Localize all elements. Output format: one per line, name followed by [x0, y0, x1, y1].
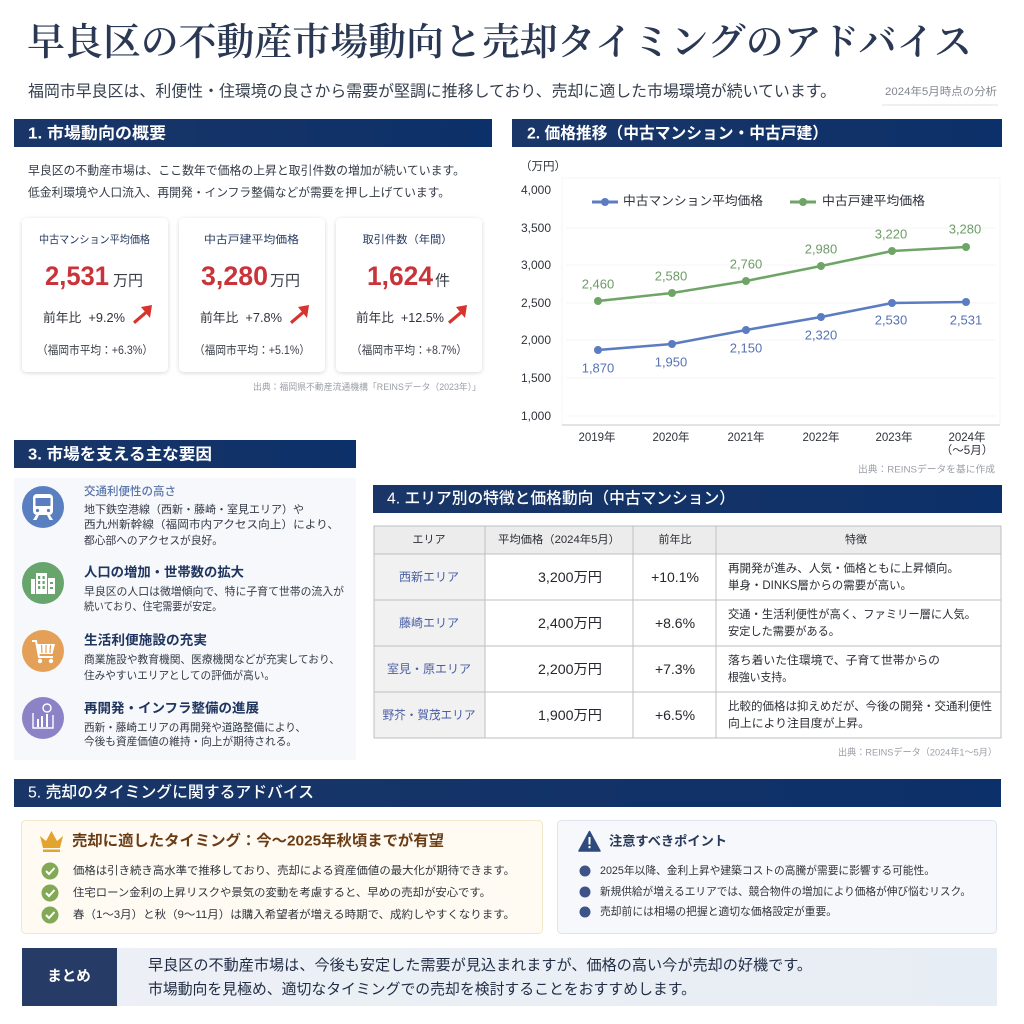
y axis labels: 1,500: [521, 371, 551, 385]
icon: redevelopment: [22, 697, 64, 739]
row: Noke: 向上により注目度が上昇。: [728, 716, 870, 730]
callout: cautions: 新規供給が増えるエリアでは、競合物件の増加により価格が伸び悩むリスク。: [600, 885, 971, 898]
icon: crown: [40, 831, 63, 852]
area table: [374, 526, 1001, 738]
driver: transport: 都心部へのアクセスが良好。: [84, 533, 223, 547]
y axis labels: 2,000: [521, 333, 551, 347]
driver: amenities: 商業施設や教育機関、医療機関などが充実しており、: [84, 652, 340, 666]
summary band: 早良区の不動産市場は、今後も安定した需要が見込まれますが、価格の高い今が売却の好機です。: [148, 957, 812, 974]
callout: cautions: 2025年以降、金利上昇や建築コストの高騰が需要に影響する可能性。: [600, 864, 935, 877]
panel: selling advice: [14, 779, 1001, 1006]
row: Nishijin: 西新エリア: [399, 570, 459, 584]
card: transactions: 件: [435, 272, 450, 290]
icon: train: [22, 486, 64, 528]
overview text: 低金利環境や人口流入、再開発・インフラ整備などが需要を押し上げています。: [28, 186, 450, 200]
heading: section 3: 3. 市場を支える主な要因: [28, 444, 212, 464]
line chart: [520, 160, 1000, 457]
icon: warning triangle: [579, 832, 600, 851]
date label: [882, 84, 998, 106]
card: house price: [179, 218, 325, 372]
icon: shopping cart: [22, 630, 64, 672]
driver: amenities: 住みやすいエリアとしての評価が高い。: [84, 668, 275, 682]
source note: 出典：REINSデータ（2024年1〜5月）: [838, 746, 997, 758]
series: detached houses: 3,220: [875, 226, 907, 242]
heading: section 4: 4. エリア別の特徴と価格動向（中古マンション）: [387, 490, 735, 508]
driver: redevelopment: 再開発・インフラ整備の進展: [84, 700, 259, 716]
panel: price trend: [512, 119, 1002, 476]
icon: check 1: [42, 862, 58, 880]
x axis labels: 2021年: [727, 430, 765, 444]
callout: cautions: [558, 820, 996, 934]
icon: building: [22, 562, 64, 604]
heading: section 2: [512, 119, 1002, 147]
icon: up arrow: [133, 305, 152, 324]
series: detached houses: [582, 222, 981, 305]
panel: market drivers: [14, 440, 356, 760]
legend: 中古マンション平均価格: [623, 193, 763, 208]
callout: best timing: 価格は引き続き高水準で推移しており、売却による資産価値の最大化が期待できます。: [73, 863, 515, 877]
y axis labels: 3,000: [521, 258, 551, 272]
callout: best timing: 住宅ローン金利の上昇リスクや景気の変動を考慮すると、早めの売却が安心です。: [73, 885, 491, 899]
row: Muromi: 室見・原エリア: [387, 662, 471, 676]
icon: up arrow: [290, 305, 309, 324]
driver: transport: 西九州新幹線（福岡市内アクセス向上）により、: [84, 517, 339, 531]
x axis labels: （〜5月）: [941, 444, 993, 457]
driver: redevelopment: 今後も資産価値の維持・向上が期待される。: [84, 734, 297, 748]
driver: redevelopment: 西新・藤崎エリアの再開発や道路整備により、: [84, 720, 306, 734]
driver: population: 人口の増加・世帯数の拡大: [84, 564, 244, 580]
row: Nishijin: 3,200万円: [538, 569, 602, 585]
series: condominiums: 1,870: [582, 360, 614, 376]
legend: 中古戸建平均価格: [822, 193, 925, 208]
callout: cautions: 売却前には相場の把握と適切な価格設定が重要。: [600, 905, 837, 918]
series: detached houses: 2,460: [582, 276, 614, 292]
x axis labels: 2023年: [875, 430, 913, 444]
x axis labels: 2024年: [948, 430, 986, 444]
x axis labels: 2022年: [802, 430, 840, 444]
source note: 出典：REINSデータを基に作成: [858, 464, 995, 476]
row: Fujisaki: 交通・生活利便性が高く、ファミリー層に人気。: [728, 607, 976, 621]
card: condo price: （福岡市平均：+6.3%）: [37, 343, 153, 357]
y axis labels: 1,000: [521, 409, 551, 423]
row: Muromi: 2,200万円: [538, 661, 602, 677]
series: condominiums: 2,320: [805, 328, 837, 342]
callout: cautions: 注意すべきポイント: [609, 832, 727, 848]
series: condominiums: 2,530: [875, 312, 907, 328]
series: detached houses: 2,580: [655, 268, 687, 284]
row: Nishijin: 再開発が進み、人気・価格ともに上昇傾向。: [728, 561, 959, 575]
heading: section 4: [373, 485, 1002, 513]
summary band: まとめ: [47, 968, 91, 985]
driver: transport: 地下鉄空港線（西新・藤崎・室見エリア）や: [84, 502, 304, 516]
row: Fujisaki: +8.6%: [655, 615, 695, 631]
summary band: [22, 948, 997, 1006]
y axis labels: 2,500: [521, 296, 551, 310]
card: condo price: [22, 218, 168, 372]
summary band: 市場動向を見極め、適切なタイミングでの売却を検討することをおすすめします。: [148, 981, 696, 998]
heading: section 5: 5. 売却のタイミングに関するアドバイス: [28, 784, 314, 802]
heading: section 3: [14, 440, 356, 468]
driver: amenities: 生活利便施設の充実: [84, 632, 207, 648]
series: condominiums: 2,150: [730, 340, 762, 356]
row: Noke: 比較的価格は抑えめだが、今後の開発・交通利便性: [728, 699, 992, 713]
y axis labels: （万円）: [520, 160, 566, 173]
row: Muromi: 落ち着いた住環境で、子育て世帯からの: [728, 653, 940, 667]
card: condo price: 中古マンション平均価格: [39, 233, 150, 246]
icon: check 2: [42, 884, 58, 902]
driver: amenities: [22, 630, 340, 682]
table header: 特徴: [845, 532, 867, 546]
row: Fujisaki: [399, 607, 976, 638]
row: Muromi: +7.3%: [655, 661, 695, 677]
row: Noke: +6.5%: [655, 707, 695, 723]
date label: 2024年5月時点の分析: [885, 84, 997, 98]
y axis labels: [520, 160, 566, 423]
legend: [592, 193, 925, 208]
title: 早良区の不動産市場動向と売却タイミングのアドバイス: [27, 22, 972, 64]
table header: 前年比: [658, 532, 692, 546]
table header: [412, 532, 867, 546]
panel: market overview: [14, 119, 492, 392]
y axis labels: 3,500: [521, 221, 551, 235]
row: Noke: [382, 699, 992, 730]
panel: area table: [373, 485, 1002, 758]
x axis labels: 2020年: [652, 430, 690, 444]
driver: population: 早良区の人口は微増傾向で、特に子育て世帯の流入が: [84, 584, 344, 598]
driver: redevelopment: [22, 697, 306, 748]
heading: section 2: 2. 価格推移（中古マンション・中古戸建）: [527, 124, 828, 142]
callout: best timing: 売却に適したタイミング：今〜2025年秋頃までが有望: [72, 832, 444, 850]
heading: section 1: [14, 119, 492, 147]
card: transactions: 1,624: [367, 261, 433, 291]
overview text: 早良区の不動産市場は、ここ数年で価格の上昇と取引件数の増加が続いています。: [28, 164, 465, 178]
table header: エリア: [412, 534, 446, 546]
series: condominiums: [582, 298, 982, 376]
series: condominiums: 2,531: [950, 312, 982, 328]
card: condo price: 2,531: [45, 261, 109, 291]
row: Noke: 1,900万円: [538, 707, 602, 723]
icon: up arrow: [448, 305, 467, 324]
source note: 出典：福岡県不動産流通機構「REINSデータ（2023年）」: [253, 381, 481, 392]
series: detached houses: 2,760: [730, 256, 762, 272]
x axis labels: [578, 430, 993, 457]
heading: section 1: 1. 市場動向の概要: [28, 124, 166, 142]
row: Nishijin: 単身・DINKS層からの需要が高い。: [728, 578, 912, 592]
card: house price: 前年比 +7.8%: [200, 310, 282, 325]
card: transactions: [336, 218, 482, 372]
card: transactions: 取引件数（年間）: [362, 233, 452, 246]
driver: population: [22, 562, 344, 613]
row: Fujisaki: 2,400万円: [538, 615, 602, 631]
row: Nishijin: [399, 561, 959, 592]
row: Muromi: 根強い支持。: [728, 670, 793, 684]
card: condo price: 万円: [113, 272, 143, 290]
card: house price: （福岡市平均：+5.1%）: [194, 343, 310, 357]
row: Muromi: [387, 653, 940, 684]
series: detached houses: 2,980: [805, 242, 837, 256]
driver: transport: [22, 484, 339, 547]
card: condo price: 前年比 +9.2%: [43, 310, 125, 325]
card: house price: 3,280: [201, 261, 268, 291]
callout: best timing: [22, 820, 542, 934]
table header: 平均価格（2024年5月）: [498, 532, 620, 546]
series: condominiums: 1,950: [655, 354, 687, 370]
subtitle: 福岡市早良区は、利便性・住環境の良さから需要が堅調に推移しており、売却に適した市場環境が続いています。: [28, 82, 836, 100]
row: Nishijin: +10.1%: [651, 569, 699, 585]
row: Noke: 野芥・賀茂エリア: [382, 708, 476, 722]
icon: check 3: [42, 906, 58, 924]
row: Fujisaki: 安定した需要がある。: [728, 624, 840, 638]
card: transactions: 前年比 +12.5%: [356, 310, 444, 325]
x axis labels: 2019年: [578, 430, 616, 444]
driver: population: 続いており、住宅需要が安定。: [84, 599, 222, 613]
card: house price: 中古戸建平均価格: [204, 233, 299, 246]
series: detached houses: 3,280: [949, 222, 981, 236]
y axis labels: 4,000: [521, 183, 551, 197]
heading: section 5: [14, 779, 1001, 807]
driver: transport: 交通利便性の高さ: [84, 484, 176, 498]
card: house price: 万円: [270, 272, 300, 290]
callout: best timing: 春（1〜3月）と秋（9〜11月）は購入希望者が増える時期で、成約しやすくなります。: [73, 907, 515, 921]
overview text: [28, 164, 465, 200]
row: Fujisaki: 藤崎エリア: [399, 616, 459, 630]
card: transactions: （福岡市平均：+8.7%）: [351, 343, 467, 357]
